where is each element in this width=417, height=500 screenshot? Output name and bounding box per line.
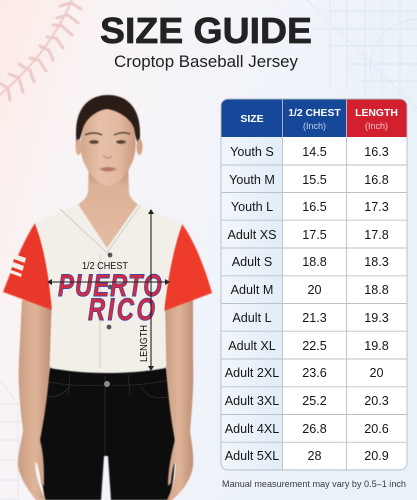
table rows: Adult 5XL <box>225 449 279 463</box>
jersey lettering <box>58 268 162 327</box>
table rows: 20.3 <box>364 394 389 408</box>
table rows <box>225 145 389 463</box>
table header: 1/2 CHEST <box>288 108 341 119</box>
table rows: 15.5 <box>302 173 327 187</box>
table rows: 26.8 <box>302 422 327 436</box>
table rows: 20.9 <box>364 449 389 463</box>
table rows: Youth S <box>230 145 274 159</box>
jeans <box>38 366 175 500</box>
jersey body <box>35 204 182 373</box>
table rows: 22.5 <box>302 339 327 353</box>
model figure with jersey <box>3 95 212 500</box>
table header <box>240 108 398 131</box>
table rows: 20 <box>369 366 384 380</box>
table rows: Adult M <box>231 283 273 297</box>
table rows: Adult S <box>232 255 272 269</box>
table rows: Adult 2XL <box>225 366 279 380</box>
table rows: Adult L <box>232 311 272 325</box>
table rows: Adult XL <box>228 339 276 353</box>
face <box>76 109 142 186</box>
footnote: Manual measurement may vary by 0.5–1 inch <box>222 479 406 489</box>
table rows: 19.8 <box>364 339 389 353</box>
table rows: 17.5 <box>302 228 327 242</box>
table rows: Youth L <box>231 200 273 214</box>
table rows: Adult XS <box>227 228 277 242</box>
length measurement arrow <box>148 209 154 371</box>
table rows: 18.3 <box>364 255 389 269</box>
table rows: 20 <box>307 283 322 297</box>
table rows: 18.8 <box>302 255 327 269</box>
table rows: 25.2 <box>302 394 327 408</box>
length label: LENGTH <box>139 325 150 362</box>
table rows: 16.3 <box>364 145 389 159</box>
table rows: 16.8 <box>364 173 389 187</box>
table rows: 17.8 <box>364 228 389 242</box>
baseball stitching decoration <box>0 0 81 100</box>
table rows: 14.5 <box>302 145 327 159</box>
neck <box>77 165 139 250</box>
subtitle: Croptop Baseball Jersey <box>114 52 298 71</box>
size table <box>221 99 407 470</box>
table rows: Youth M <box>229 173 275 187</box>
table rows: 20.6 <box>364 422 389 436</box>
chest label: 1/2 CHEST <box>82 261 128 272</box>
sleeves <box>3 223 52 310</box>
jersey lettering: RICO <box>88 292 155 327</box>
jersey placket and seams <box>60 206 140 368</box>
table rows: Adult 4XL <box>225 422 279 436</box>
jersey lettering: PUERTO <box>58 268 162 303</box>
table rows: 21.3 <box>302 311 327 325</box>
jeans details <box>48 374 168 455</box>
table header: (Inch) <box>303 121 326 131</box>
jersey buttons <box>107 253 112 329</box>
hair <box>76 95 140 146</box>
table rows: 23.6 <box>302 366 327 380</box>
table header: (Inch) <box>365 121 388 131</box>
table rows: 16.5 <box>302 200 327 214</box>
sleeve flag <box>10 254 26 277</box>
title: SIZE GUIDE <box>100 10 312 51</box>
table rows: 19.3 <box>364 311 389 325</box>
table rows: 17.3 <box>364 200 389 214</box>
table rows: Adult 3XL <box>225 394 279 408</box>
table rows: 28 <box>307 449 322 463</box>
chest measurement arrow <box>47 279 170 285</box>
table header: SIZE <box>240 113 264 125</box>
table header: LENGTH <box>355 108 398 119</box>
arms <box>18 300 193 500</box>
table rows: 18.8 <box>364 283 389 297</box>
